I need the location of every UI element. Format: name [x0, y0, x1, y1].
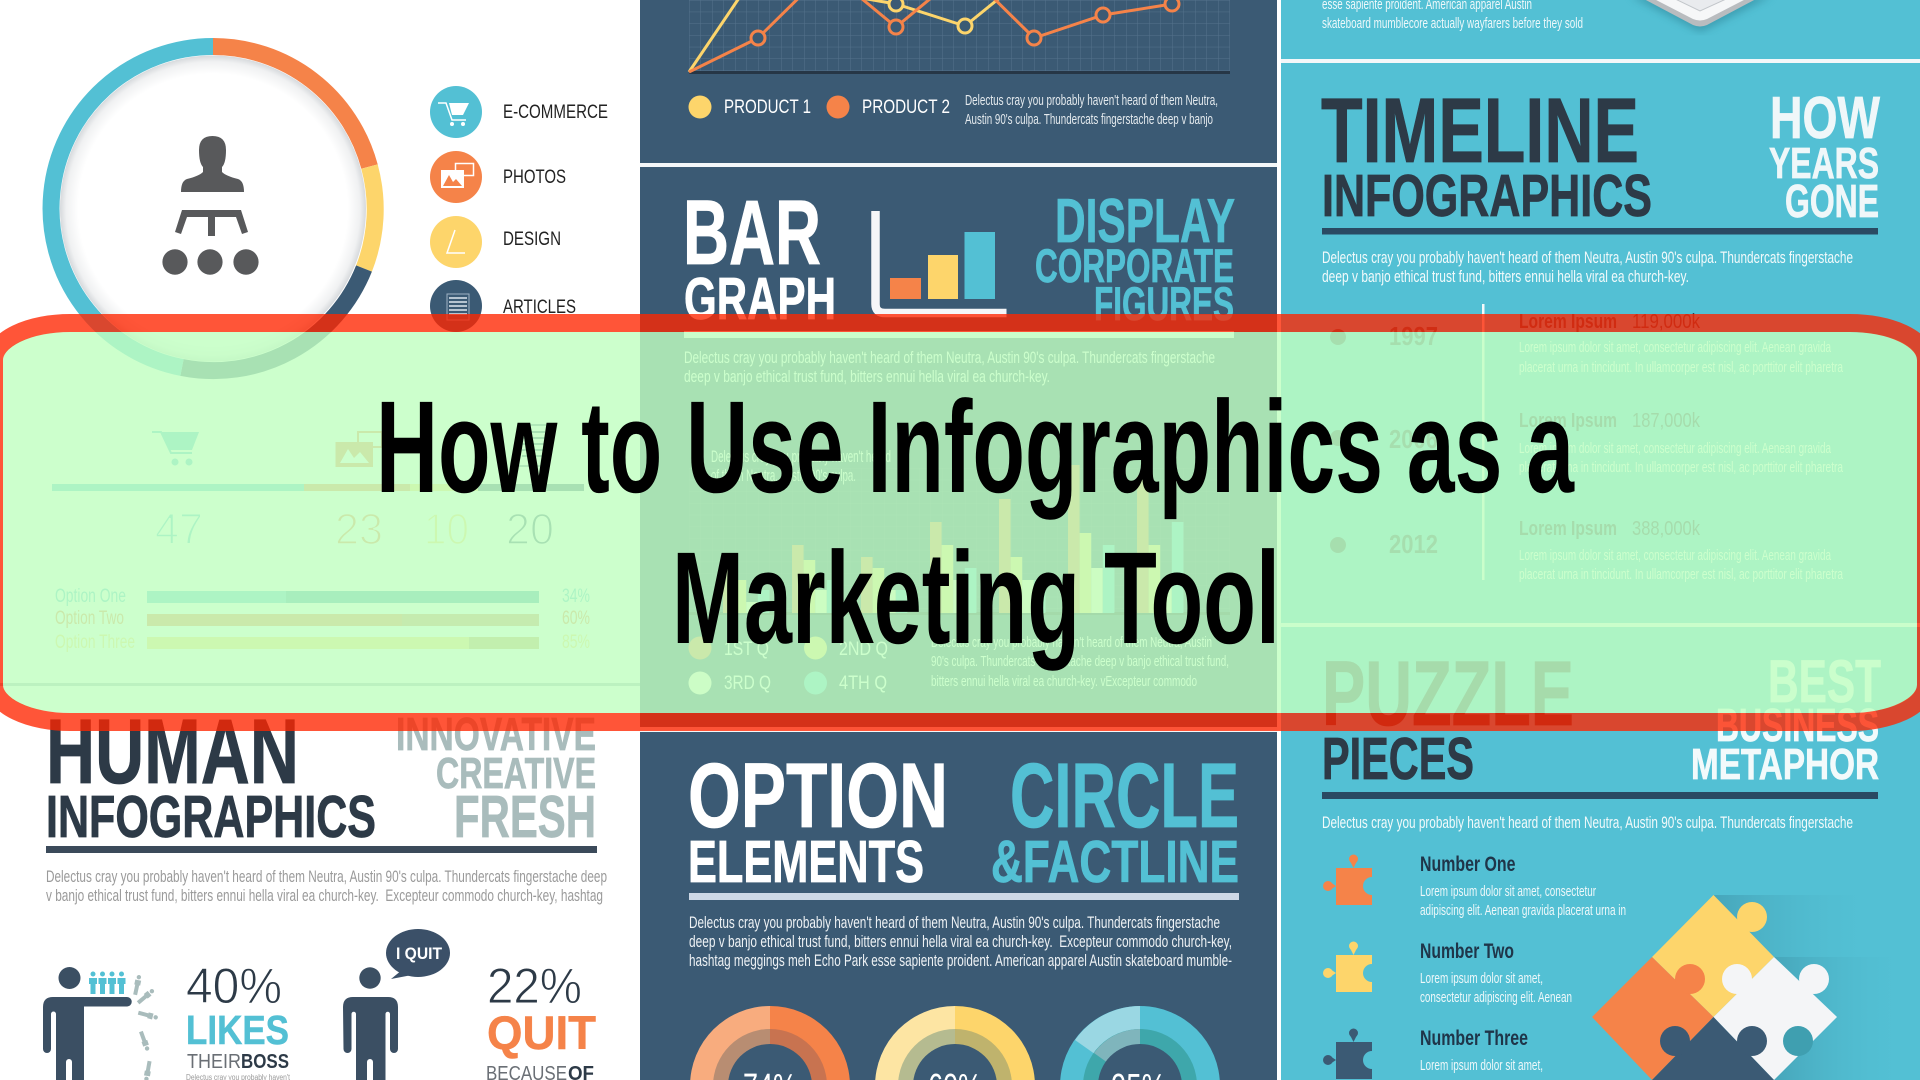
icon: e-commerce cart badge: [430, 86, 482, 138]
chart: option progress bars: 34%: [562, 586, 590, 607]
heading: option elements: OPTION: [688, 745, 948, 847]
rule: [46, 846, 597, 853]
text block: timeline intro: deep v banjo ethical trust fund, bitters ennui hella viral ea church-key.: [1322, 268, 1689, 286]
entry: number two: consectetur adipiscing elit. Aenean: [1420, 989, 1572, 1006]
heading: human infographics: INFOGRAPHICS: [46, 784, 376, 850]
chart: 74 percent donut: [690, 1006, 850, 1080]
entry: number two: Number Two: [1420, 940, 1514, 963]
heading: bar graph: GRAPH: [684, 266, 836, 332]
text block: option intro: [689, 914, 1232, 970]
timeline entry: 2012: [1330, 518, 1843, 583]
numbers: share values: 23: [335, 505, 383, 554]
icon: navy puzzle piece: [1323, 1028, 1372, 1079]
panel: red band outline: [0, 323, 1920, 722]
chart: stacked share bar: [52, 484, 584, 491]
stat: 40 percent likes their boss: THEIR: [187, 1051, 241, 1073]
text block: human intro: [46, 868, 607, 905]
heading: innovative creative fresh: CREATIVE: [436, 749, 596, 798]
chart: option progress bars: [55, 586, 590, 653]
entry: number one: [1420, 853, 1626, 919]
text block: option intro: Delectus cray you probably haven't heard of them Neutra, Austin 90's culpa. Thundercats fingerstache: [689, 914, 1220, 932]
text block: bar chart note: Delectus cray you probably haven't heard: [711, 448, 891, 466]
text block: line chart note: Delectus cray you probably haven't heard of them Neutra,: [965, 93, 1218, 109]
heading: circle and factline: &FACTLINE: [991, 829, 1239, 895]
numbers: share values: 10: [424, 505, 469, 554]
text block: line chart note: Austin 90's culpa. Thundercats fingerstache deep v banjo: [965, 112, 1213, 128]
icon: tablet corner: [1627, 0, 1773, 32]
heading: puzzle pieces: PIECES: [1322, 726, 1474, 792]
icon: orange puzzle piece: [1323, 854, 1372, 905]
numbers: share values: 47: [155, 505, 203, 554]
timeline entry: 1997: Lorem Ipsum: [1519, 311, 1617, 333]
text block: bar graph intro: deep v banjo ethical trust fund, bitters ennui hella viral ea church-key.: [684, 368, 1050, 386]
entry: number one: adipiscing elit. Aenean gravida placerat urna in: [1420, 902, 1626, 919]
label: design: DESIGN: [503, 229, 561, 250]
rule: [1322, 792, 1878, 799]
chart: option progress bars: Option One: [55, 586, 126, 607]
timeline entry: 2006: 2006: [1389, 424, 1438, 454]
heading: how years gone: YEARS: [1769, 139, 1879, 188]
chart: option progress bars: Option Three: [55, 632, 135, 653]
timeline entry: 1997: 119,000k: [1632, 311, 1701, 333]
chart: segmented ring with hierarchy icon: [51, 46, 375, 371]
entry: number one: Number One: [1420, 853, 1516, 876]
entry: number three: [1420, 1027, 1543, 1074]
icon: large cart: [152, 432, 199, 466]
heading: puzzle pieces: [1322, 643, 1574, 792]
icon: person quitting with speech bubble: [343, 929, 450, 1080]
divider: navy column lower: [640, 727, 1277, 732]
heading: innovative creative fresh: FRESH: [454, 784, 596, 850]
title: [376, 373, 1575, 671]
text block: top teal note: [1322, 0, 1583, 32]
heading: bar graph: BAR: [683, 182, 821, 284]
label: e-commerce: E-COMMERCE: [503, 102, 608, 123]
timeline entry: 1997: 1997: [1389, 321, 1438, 351]
text block: quarters note: bitters ennui hella viral ea church-key. vExcepteur commodo: [931, 673, 1197, 690]
entry: number two: [1420, 940, 1572, 1006]
text block: top teal note: skateboard mumblecore actually wayfarers before they sold: [1322, 15, 1583, 32]
chart: option progress bars: 85%: [562, 632, 590, 653]
heading: display corporate figures: CORPORATE: [1035, 239, 1234, 292]
icon: photos badge: [430, 151, 482, 203]
icon: jigsaw diamond: [1592, 895, 1910, 1080]
rule: [689, 893, 1239, 900]
stat: 22 percent quit because of: 22%: [487, 958, 582, 1014]
legend: quarters: 2ND Q: [839, 639, 888, 660]
icon: design badge: [430, 216, 482, 268]
stat: 40 percent likes their boss: LIKES: [186, 1007, 289, 1053]
heading: puzzle pieces: PUZZLE: [1322, 643, 1574, 745]
stat: 40 percent likes their boss: [186, 958, 291, 1080]
heading: timeline infographics: [1321, 80, 1652, 229]
heading: innovative creative fresh: [396, 708, 596, 850]
heading: human infographics: [46, 701, 376, 850]
icon: articles badge: [430, 280, 482, 332]
icon: person quitting with speech bubble: I QUIT: [396, 944, 443, 963]
text block: line chart note: [965, 93, 1218, 128]
heading: circle and factline: CIRCLE: [1010, 745, 1239, 847]
legend: products: [688, 96, 950, 118]
legend: quarters: 1ST Q: [724, 639, 769, 660]
heading: display corporate figures: FIGURES: [1094, 277, 1234, 330]
timeline entry: 2006: 187,000k: [1632, 410, 1701, 432]
text block: option intro: deep v banjo ethical trust fund, bitters ennui hella viral ea church-key. Excepteur commodo church-key,: [689, 933, 1232, 951]
text block: quarters note: [931, 634, 1229, 690]
heading: display corporate figures: DISPLAY: [1055, 187, 1235, 256]
icon: person pointing with falling staff: [43, 967, 159, 1080]
numbers: share values: [155, 505, 554, 554]
stat: 40 percent likes their boss: BOSS: [241, 1051, 289, 1073]
divider: teal column lower: [1281, 623, 1920, 627]
icon: bar chart: [876, 211, 1006, 313]
divider: navy column upper: [640, 163, 1277, 167]
legend: products: PRODUCT 1: [724, 97, 811, 118]
heading: circle and factline: [991, 745, 1239, 895]
entry: number three: Lorem ipsum dolor sit amet,: [1420, 1057, 1543, 1074]
timeline entry: 2012: 388,000k: [1632, 518, 1701, 540]
heading: how years gone: GONE: [1785, 175, 1879, 227]
label: photos: PHOTOS: [503, 167, 566, 188]
heading: how years gone: [1769, 85, 1880, 227]
icon: large document: [518, 425, 549, 466]
timeline entry: 2012: Lorem Ipsum: [1519, 518, 1617, 540]
chart: timeline: [1330, 304, 1843, 583]
heading: human infographics: HUMAN: [46, 701, 299, 803]
label: articles: ARTICLES: [503, 297, 576, 318]
timeline entry: 2012: 2012: [1389, 529, 1438, 559]
text block: quarters note: 90's culpa. Thundercats fingerstache deep v banjo ethical trust fund,: [931, 653, 1229, 670]
text block: bar graph intro: Delectus cray you probably haven't heard of them Neutra, Austin 90's culpa. Thundercats fingerstache: [684, 349, 1215, 367]
text block: quarters note: Delectus cray you probably haven't heard of them Neutra, Austin: [931, 634, 1212, 651]
divider: teal column upper: [1281, 59, 1920, 63]
panel: teal column background: [1281, 0, 1920, 1080]
chart: option progress bars: Option Two: [55, 608, 124, 629]
heading: how years gone: HOW: [1770, 85, 1880, 151]
text block: human intro: Delectus cray you probably haven't heard of them Neutra, Austin 90's culpa. Thundercats fingerstache deep: [46, 868, 607, 886]
stat: 22 percent quit because of: QUIT: [487, 1006, 596, 1059]
timeline entry: 1997: [1330, 311, 1843, 376]
text block: human intro: v banjo ethical trust fund, bitters ennui hella viral ea church-key. Excepteur commodo church-key, hashtag: [46, 887, 603, 905]
entry: number two: Lorem ipsum dolor sit amet,: [1420, 970, 1543, 987]
legend: quarters: 3RD Q: [724, 673, 771, 694]
icon: person over three nodes: [162, 136, 259, 275]
legend: quarters: 4TH Q: [839, 673, 887, 694]
text block: bar chart note: [711, 448, 891, 485]
text block: bar graph intro: [684, 349, 1215, 386]
text block: timeline intro: [1322, 249, 1853, 286]
heading: display corporate figures: [1035, 187, 1235, 330]
entry: number three: Number Three: [1420, 1027, 1528, 1050]
heading: option elements: ELEMENTS: [688, 829, 924, 895]
heading: timeline infographics: TIMELINE: [1321, 80, 1639, 182]
text block: bar chart note: of them Neutra, Austin 90's culpa.: [711, 467, 856, 485]
rule: [684, 331, 1234, 338]
timeline entry: 2006: Lorem Ipsum: [1519, 410, 1617, 432]
icon: large photos: [336, 432, 382, 467]
numbers: share values: 20: [506, 505, 554, 554]
panel: navy column background: [640, 0, 1277, 1080]
text block: option intro: hashtag meggings meh Echo Park esse sapiente proident. American apparel Austin skateboard mumble-: [689, 952, 1232, 970]
panel: white column background: [0, 0, 640, 1080]
title: Marketing Tool: [672, 524, 1280, 671]
legend: products: PRODUCT 2: [862, 97, 950, 118]
chart: product line chart: [689, 0, 1230, 74]
heading: innovative creative fresh: INNOVATIVE: [396, 708, 596, 760]
stat: 22 percent quit because of: [486, 958, 596, 1080]
chart: option progress bars: 60%: [562, 608, 590, 629]
legend: quarters: [688, 636, 888, 694]
entry: number one: Lorem ipsum dolor sit amet, consectetur: [1420, 883, 1596, 900]
heading: best business metaphor: [1691, 648, 1881, 789]
heading: timeline infographics: INFOGRAPHICS: [1322, 163, 1652, 229]
timeline entry: 2006: [1330, 410, 1843, 476]
rule: [1322, 228, 1878, 234]
chart: 95 percent donut: [1060, 1006, 1220, 1080]
chart: 60 percent donut: [875, 1006, 1035, 1080]
panel: translucent green band: [3, 332, 1917, 713]
stat: 40 percent likes their boss: 40%: [186, 958, 282, 1014]
divider: white column: [0, 683, 640, 686]
heading: bar graph: [683, 182, 836, 332]
chart: quarterly bar chart: [689, 465, 1230, 615]
heading: option elements: [688, 745, 948, 895]
icon: yellow puzzle piece: [1323, 942, 1372, 992]
